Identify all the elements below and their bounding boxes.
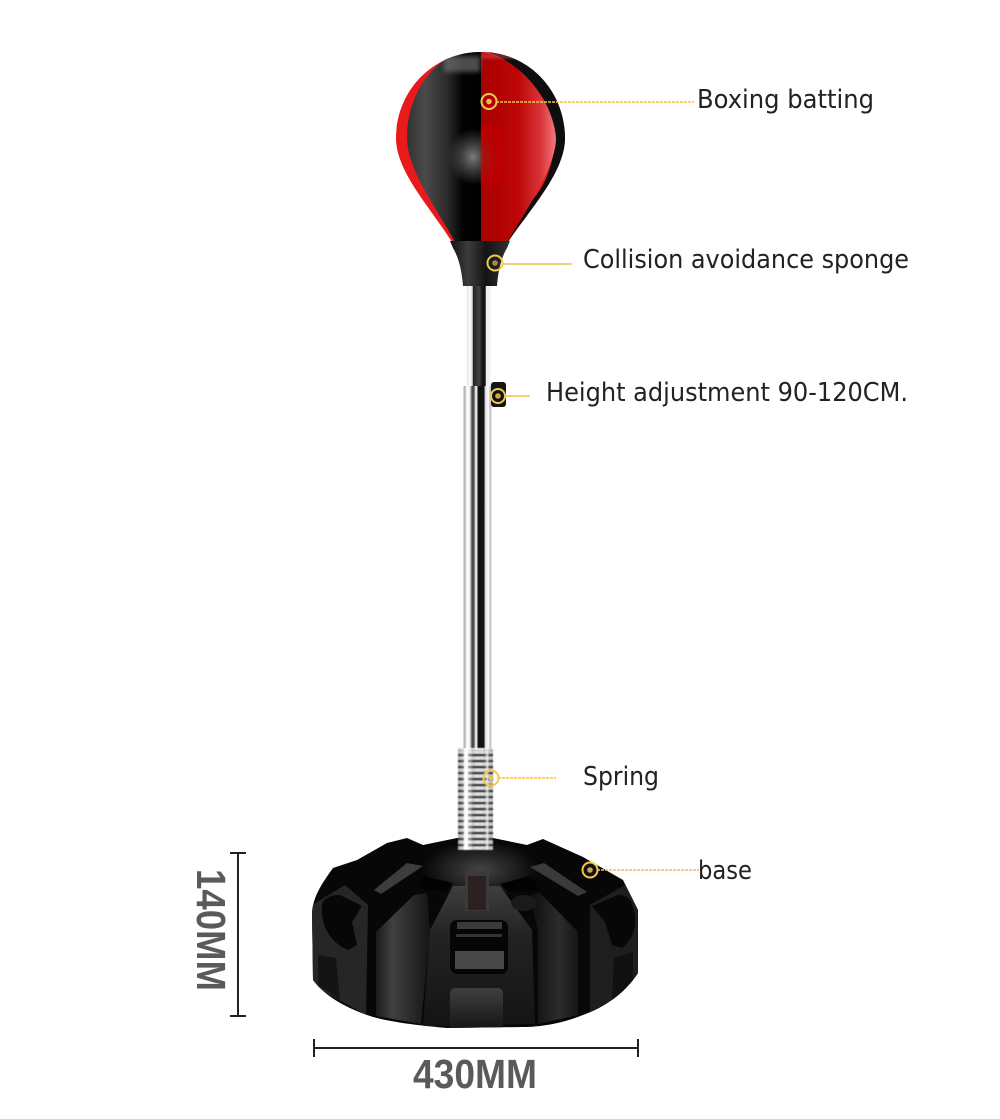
callout: height adjustment: Height adjustment 90-120CM. bbox=[546, 378, 908, 408]
infographic canvas bbox=[196, 52, 908, 1088]
base bbox=[312, 838, 640, 1030]
top right black band bbox=[488, 52, 565, 241]
punching ball bbox=[396, 50, 570, 244]
centre front panel bbox=[423, 886, 535, 1026]
right side opening bbox=[592, 895, 635, 948]
left top strip bbox=[374, 863, 423, 894]
callout: base bbox=[582, 856, 752, 886]
handle bbox=[450, 920, 508, 974]
callout: spring: Spring bbox=[583, 762, 659, 792]
right front panel bbox=[530, 893, 578, 1024]
dimension: height 140MM bbox=[188, 853, 246, 1016]
top slot bbox=[465, 871, 489, 911]
right wedge notch bbox=[500, 876, 532, 892]
right side wall bbox=[590, 885, 640, 1012]
cone highlight bbox=[430, 845, 530, 892]
height adjustment knob bbox=[491, 382, 506, 407]
callout: base: base bbox=[698, 856, 752, 886]
left side opening bbox=[322, 895, 362, 950]
callout: spring bbox=[484, 762, 659, 792]
callout: collision avoidance sponge: Collision avoidance sponge bbox=[583, 245, 909, 275]
top highlight bbox=[444, 56, 480, 72]
black left panel bbox=[407, 50, 481, 244]
left side wall bbox=[312, 885, 368, 1015]
collision sponge collar bbox=[450, 241, 510, 286]
right top strip bbox=[530, 863, 587, 896]
dimension: width 430MM: 430MM bbox=[413, 1051, 537, 1097]
callout: boxing batting bbox=[482, 85, 874, 115]
dimension: height 140MM: 140MM bbox=[188, 869, 234, 991]
dimension: width 430MM bbox=[314, 1039, 638, 1097]
centre highlight bbox=[450, 131, 491, 182]
left wedge notch bbox=[427, 877, 453, 892]
pole bbox=[463, 284, 492, 750]
upper tube bbox=[467, 284, 491, 388]
red right panel bbox=[481, 52, 556, 244]
dark recess at right bbox=[511, 895, 537, 911]
spring bbox=[458, 748, 493, 850]
lower notch bbox=[450, 988, 503, 1030]
callout: boxing batting: Boxing batting bbox=[697, 85, 874, 115]
lower chrome tube bbox=[463, 386, 492, 750]
left front panel bbox=[376, 893, 430, 1024]
